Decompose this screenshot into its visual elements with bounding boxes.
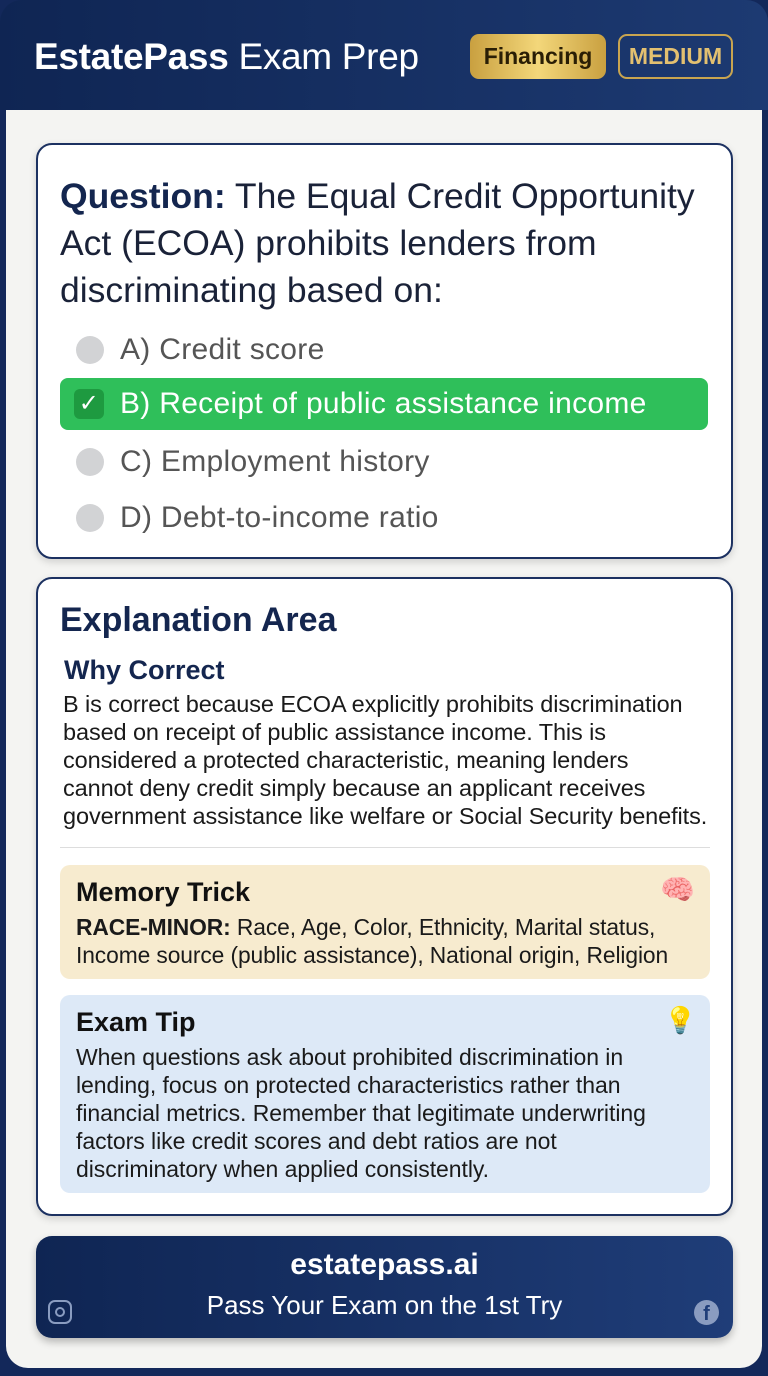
icon: facebook: [694, 1300, 719, 1325]
badge: medium: MEDIUM: [629, 43, 722, 69]
option B correct: ✓: [79, 390, 99, 417]
option C: C) Employment history: [120, 445, 430, 478]
header: [0, 0, 768, 110]
icon: brain: 🧠: [660, 874, 695, 905]
memory trick text: Income source (public assistance), National origin, Religion: [76, 942, 668, 968]
why correct heading: Why Correct: [64, 655, 225, 685]
option B correct: B) Receipt of public assistance income: [120, 387, 647, 420]
icon: instagram: [48, 1300, 72, 1324]
question text: [60, 176, 695, 310]
exam tip text: factors like credit scores and debt ratios are not: [76, 1128, 557, 1154]
badge: medium: [618, 34, 733, 79]
title: EstatePass Exam Prep: [34, 36, 419, 77]
why correct text: B is correct because ECOA explicitly prohibits discrimination: [63, 691, 683, 717]
option B correct: [60, 378, 708, 430]
question text: Act (ECOA) prohibits lenders from: [60, 223, 597, 263]
why correct text: government assistance like welfare or Social Security benefits.: [63, 803, 707, 829]
option D: D) Debt-to-income ratio: [120, 501, 439, 534]
memory trick box: [60, 865, 710, 979]
why correct text: [63, 691, 707, 829]
footer url: estatepass.ai: [290, 1248, 479, 1281]
why correct text: considered a protected characteristic, meaning lenders: [63, 747, 628, 773]
panel: explanation: [36, 577, 733, 1216]
why correct text: based on receipt of public assistance income. This is: [63, 719, 606, 745]
memory trick text: RACE-MINOR: Race, Age, Color, Ethnicity, Marital status,: [76, 914, 655, 940]
exam tip text: When questions ask about prohibited discrimination in: [76, 1044, 623, 1070]
question text: discriminating based on:: [60, 270, 443, 310]
exam tip box: [60, 995, 710, 1193]
footer banner: [36, 1236, 733, 1338]
icon: facebook: f: [703, 1303, 710, 1325]
exam tip heading: Exam Tip: [76, 1007, 196, 1037]
badge: financing: Financing: [484, 43, 592, 69]
memory trick heading: Memory Trick: [76, 877, 250, 907]
exam tip text: financial metrics. Remember that legitimate underwriting: [76, 1100, 646, 1126]
icon: lightbulb: 💡: [664, 1005, 696, 1035]
option A: A) Credit score: [120, 333, 325, 366]
badge: financing: [470, 34, 606, 79]
question text: Question: The Equal Credit Opportunity: [60, 176, 695, 216]
footer tagline: Pass Your Exam on the 1st Try: [207, 1290, 562, 1320]
explanation heading: Explanation Area: [60, 601, 336, 639]
why correct text: cannot deny credit simply because an applicant receives: [63, 775, 645, 801]
exam tip text: discriminatory when applied consistently.: [76, 1156, 489, 1182]
exam tip text: [76, 1044, 646, 1182]
panel: question: [36, 143, 733, 559]
memory trick text: [76, 914, 668, 968]
exam tip text: lending, focus on protected characteristics rather than: [76, 1072, 620, 1098]
